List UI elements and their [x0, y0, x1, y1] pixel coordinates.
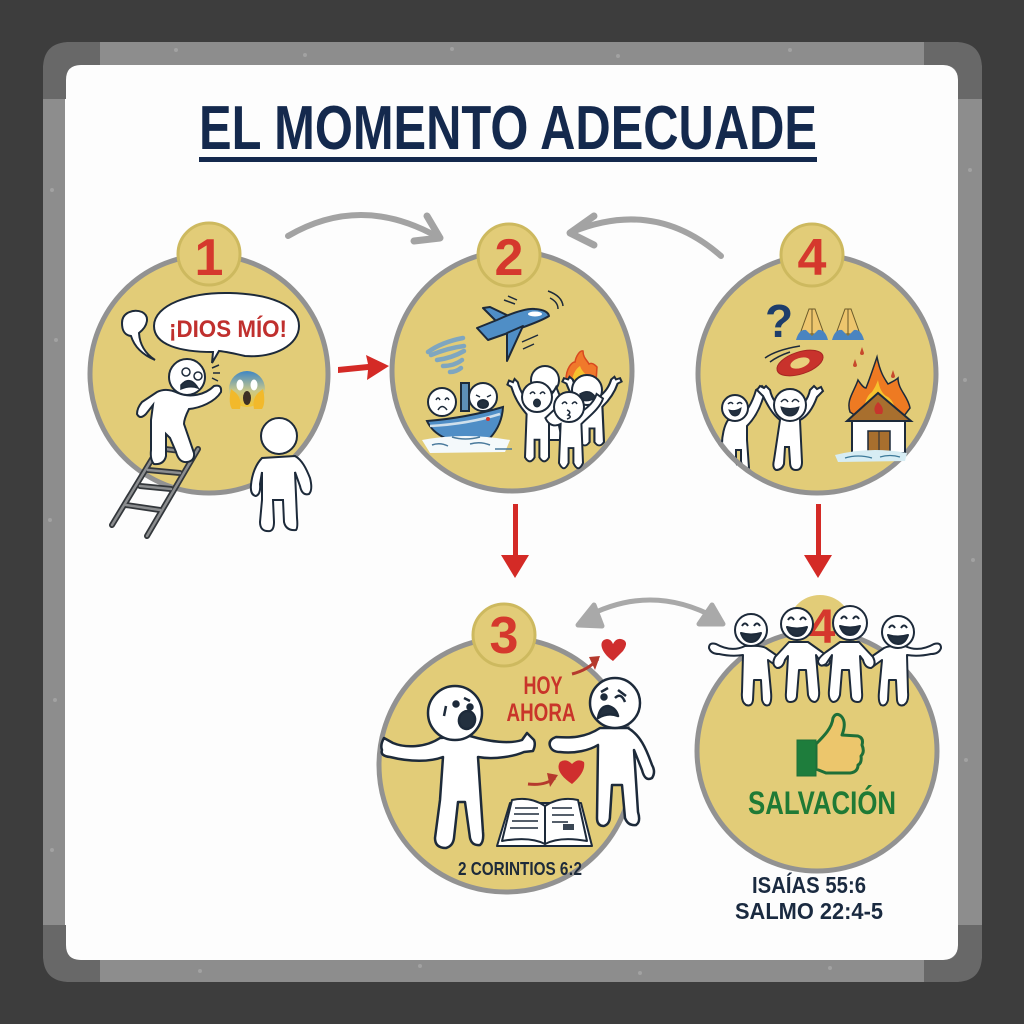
icon: red spinning disc [765, 345, 826, 381]
text: hoy ahora [506, 672, 576, 727]
figure: person left with open arms [381, 686, 535, 848]
figure: cheering person left [720, 386, 768, 472]
speech bubble: dios mio [154, 293, 299, 363]
badge: number 2: 2 [495, 229, 523, 287]
icon: screaming emoji [229, 371, 265, 409]
icon: boat with people [422, 383, 512, 453]
figures: frightened crowd [507, 366, 622, 468]
text: hoy ahora: HOY [524, 672, 563, 700]
text: bible references: ISAÍAS 55:6 [752, 871, 866, 898]
badge: number 3 [473, 604, 535, 666]
arrow: red 1 to 2 [338, 355, 389, 380]
panel: step 4 salvation [697, 595, 941, 871]
arrow: grey 1 to 2 [288, 215, 440, 241]
badge: number 4 behind figures [788, 595, 852, 659]
text: 2 corintios 6:2: 2 CORINTIOS 6:2 [458, 859, 582, 879]
title: EL MOMENTO ADECUADE [199, 94, 817, 163]
badge: number 1 [178, 223, 240, 287]
text: bible references [735, 871, 883, 924]
badge: number 1: 1 [195, 229, 223, 287]
figure: cheering person right [757, 386, 823, 470]
text: bible references: SALMO 22:4-5 [735, 898, 883, 924]
text: salvacion: SALVACIÓN [748, 785, 896, 821]
icon: top heart with arrow [572, 639, 626, 674]
icon: thumbs up [797, 714, 863, 776]
figure: standing person [251, 418, 311, 531]
icon: question mark: ? [765, 295, 793, 347]
icon: ladder [112, 449, 198, 536]
badge: number 4 [781, 224, 843, 287]
text: hoy ahora: AHORA [506, 699, 576, 727]
speech bubble: dios mio: ¡DIOS MÍO! [169, 315, 287, 343]
figure: scared person on ladder [137, 359, 221, 464]
panel: step 4 upper [698, 224, 936, 493]
arrow: red 4 to 5 [804, 504, 832, 578]
panel: step 2 [392, 224, 632, 491]
icon: open bible [497, 799, 592, 846]
icon: flame [566, 351, 597, 382]
badge: number 2 [478, 224, 540, 287]
icon: burning house [835, 347, 911, 462]
icon: tornado [428, 338, 464, 372]
badge: number 4: 4 [798, 229, 827, 287]
panel: step 1 [90, 223, 328, 536]
figure: person right crying [550, 678, 654, 826]
arrow: red 2 to 3 [501, 504, 529, 578]
panel: step 3 [379, 604, 654, 892]
figures: group holding hands [709, 606, 941, 705]
arrow: grey double 3 and 5 [578, 600, 723, 626]
badge: number 4 behind figures: 4 [809, 601, 836, 654]
small empty speech bubble [122, 311, 155, 360]
icon: airplane [477, 291, 563, 361]
icon: lower heart with arrow [528, 760, 584, 787]
icon: praying hands [796, 309, 864, 340]
badge: number 3: 3 [490, 607, 518, 665]
arrow: grey 4 to 2 [570, 216, 721, 256]
